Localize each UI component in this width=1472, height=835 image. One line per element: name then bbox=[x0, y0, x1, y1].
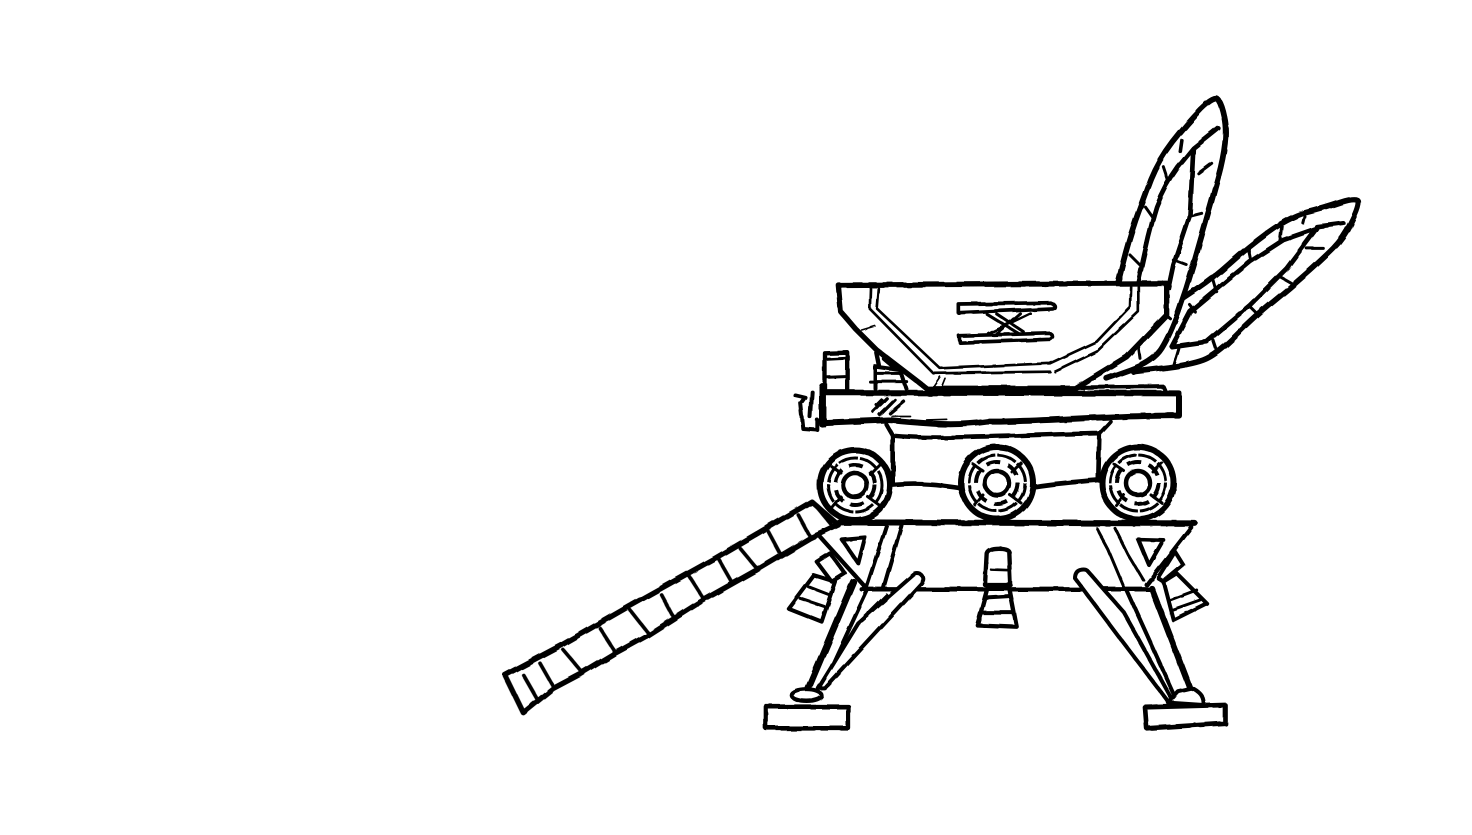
landing pad: left bbox=[766, 707, 848, 728]
emblem: crossed bars bbox=[958, 303, 1055, 343]
descent stage deck bbox=[820, 522, 1195, 589]
wheels bbox=[820, 447, 1174, 520]
deck equipment: tower, block and hook bbox=[795, 353, 907, 430]
hopper body with emblem bbox=[838, 283, 1167, 388]
foot: left bbox=[792, 690, 822, 701]
rover body bbox=[886, 422, 1111, 488]
triangle vent: left bbox=[842, 537, 865, 563]
solar wing: rear lower bbox=[1133, 199, 1358, 372]
thruster: centre bbox=[977, 548, 1017, 627]
landing pad: right bbox=[1145, 705, 1225, 728]
wheel: right bbox=[1102, 447, 1174, 519]
access ramp bbox=[505, 502, 838, 713]
landing leg: right bbox=[1075, 569, 1225, 728]
triangle vent: right bbox=[1138, 539, 1163, 565]
solar wing: upper bbox=[1107, 99, 1226, 378]
thruster: left bbox=[788, 553, 845, 622]
foot: right bbox=[1168, 688, 1204, 705]
landing leg: left bbox=[766, 574, 923, 728]
wheel: middle bbox=[961, 447, 1033, 519]
platform bbox=[823, 387, 1179, 424]
wheel: left bbox=[820, 450, 890, 520]
thruster: right bbox=[1158, 552, 1207, 620]
